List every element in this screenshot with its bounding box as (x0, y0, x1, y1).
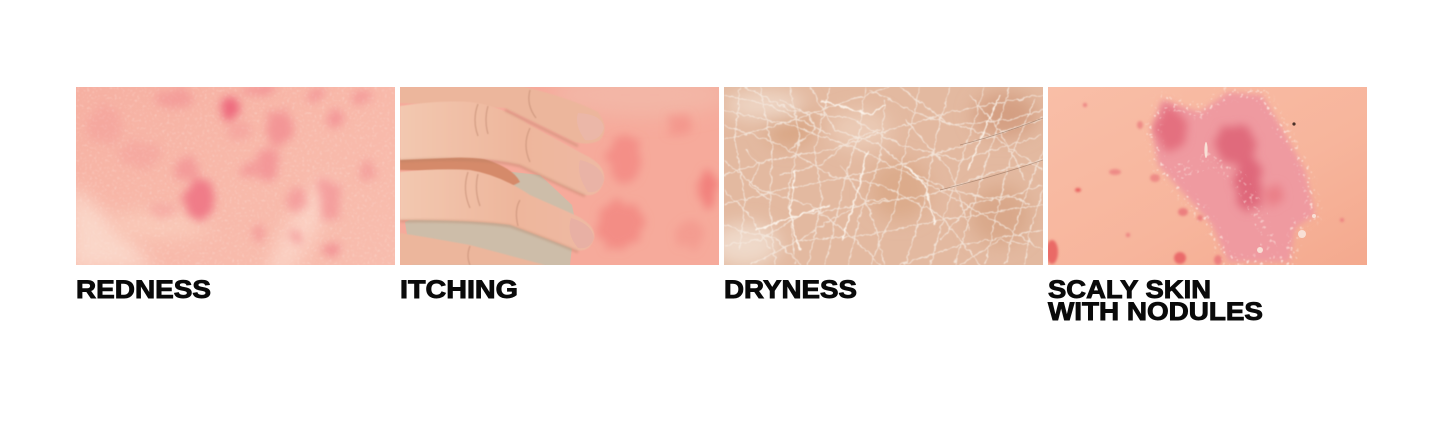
label: scaly skin with nodules: SCALY SKIN (1048, 276, 1211, 304)
bottom finger (400, 233, 545, 265)
scales (1146, 87, 1322, 265)
gaps between fingers (405, 172, 575, 265)
label: scaly skin with nodules: WITH NODULES (1048, 298, 1263, 326)
photo: fingers scratching skin (400, 87, 719, 265)
back finger (400, 87, 605, 144)
panel: itching (400, 87, 719, 298)
panel: redness (70, 84, 395, 304)
photo: scaly lesion with nodules (1046, 87, 1367, 265)
middle finger (400, 169, 594, 250)
panel: dryness (710, 87, 1043, 304)
label: scaly skin with nodules (1048, 276, 1263, 326)
photo: red blotchy skin (76, 87, 395, 265)
label: dryness: DRYNESS (724, 276, 857, 304)
label: itching: ITCHING (400, 276, 518, 304)
finger shadows (400, 110, 585, 252)
index finger (400, 102, 604, 195)
infographic: skin symptoms (76, 87, 1367, 320)
label: redness: REDNESS (76, 276, 211, 304)
panel: scaly skin with nodules (1046, 87, 1367, 326)
scattered nodules (1046, 103, 1344, 265)
photo: dry cracked skin (710, 87, 1043, 267)
